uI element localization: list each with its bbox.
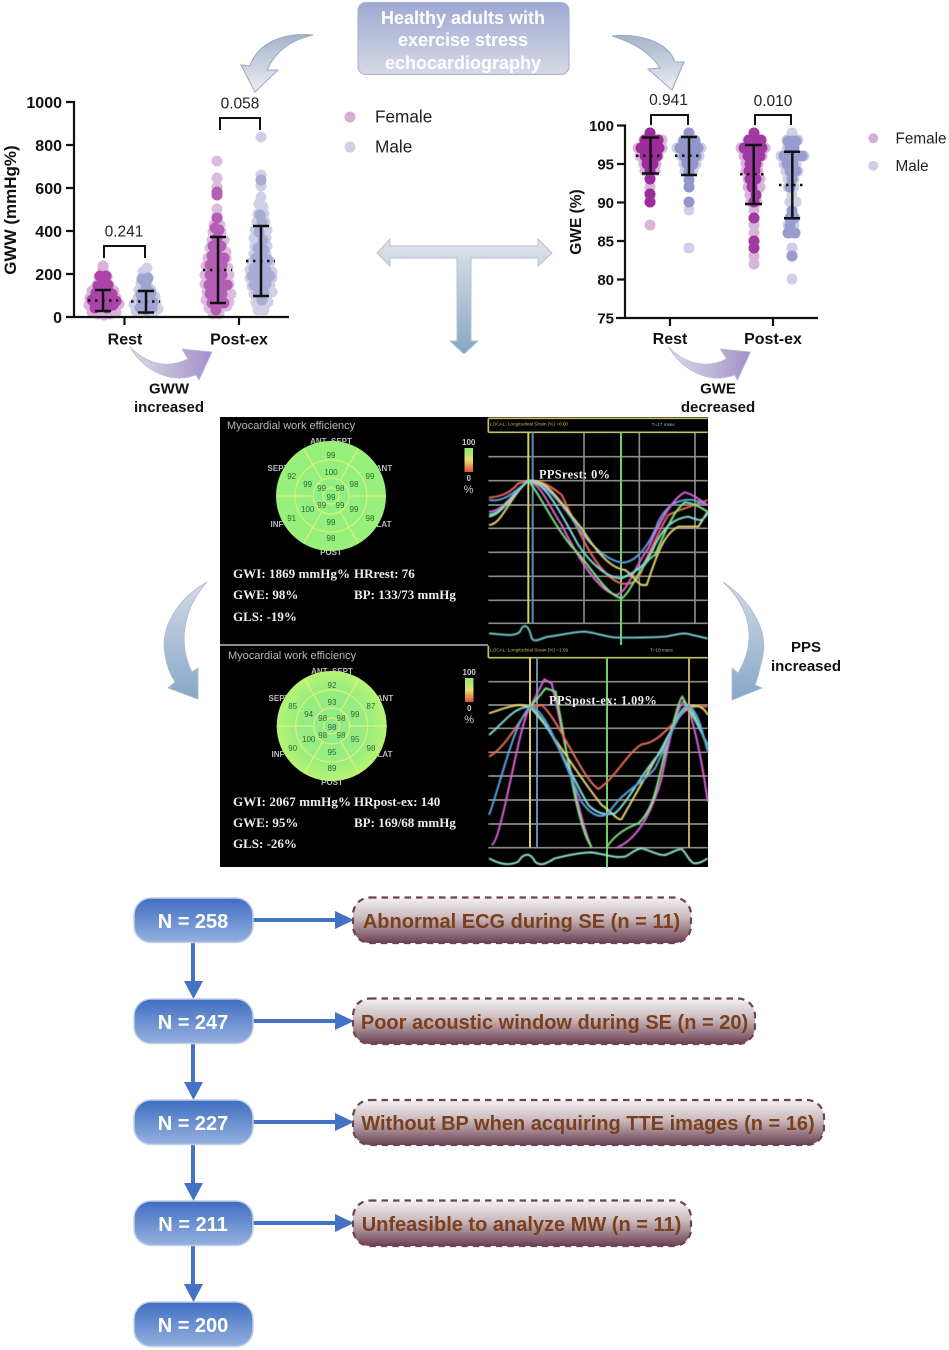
y tick labels: 85	[597, 234, 614, 250]
y tick labels: 100	[589, 118, 614, 135]
exclusion: unfeasible MW: Unfeasible to analyze MW (n = 11)	[362, 1214, 681, 1236]
panel: bullseye post-exercise: 85	[288, 702, 298, 711]
box: N = 258	[134, 898, 253, 942]
panel: strain curves at rest: T=17 msec	[652, 422, 675, 427]
panel: bullseye post-exercise: 99	[351, 710, 360, 719]
panel: bullseye at rest: INF	[271, 520, 284, 529]
exclusion: abnormal ECG: Abnormal ECG during SE (n = 11)	[363, 911, 680, 933]
error bars and means	[636, 137, 806, 218]
legend: GWW chart	[344, 106, 432, 156]
panel: bullseye post-exercise: SEPT	[269, 694, 290, 703]
panel: echo images	[220, 417, 708, 868]
axes	[66, 102, 289, 325]
label: GWW increased: GWW	[149, 380, 190, 398]
panel: strain curves at rest: LOCAL: Longitudinal Strain (%) =0.00	[490, 422, 568, 427]
dots: rest male	[677, 133, 701, 248]
dots: post-exercise male	[781, 133, 804, 279]
y tick labels	[26, 95, 62, 327]
colour bar post-exercise: 100	[463, 668, 476, 677]
dots: rest male	[134, 268, 158, 313]
stats post-exercise	[233, 794, 456, 851]
dots: rest female	[89, 266, 119, 315]
exclusion: without BP: Without BP when acquiring TTE images (n = 16)	[361, 1113, 815, 1135]
x labels: Post-ex	[744, 331, 802, 348]
panel: bullseye post-exercise: 93	[328, 698, 337, 707]
title box: healthy adults	[358, 2, 569, 74]
legend: GWE chart: Female	[896, 130, 947, 148]
p value brackets: 0.241	[105, 224, 143, 240]
label: PPS increased: PPS	[791, 639, 821, 656]
panel: bullseye post-exercise: LAT	[378, 750, 393, 759]
stats rest: HRrest: 76	[354, 566, 415, 581]
colour bar post-exercise: %	[464, 714, 474, 726]
dots: post-exercise male	[250, 137, 272, 310]
x labels	[653, 331, 802, 348]
arrow: T-shaped three-way	[377, 239, 552, 354]
box: N = 200	[134, 1302, 253, 1346]
panel: bullseye at rest: 99	[317, 501, 327, 510]
dots: rest female	[638, 133, 662, 225]
panel: bullseye post-exercise: 92	[328, 681, 337, 690]
stats rest: GWI: 1869 mmHg%	[233, 566, 350, 581]
label: GWE decreased: decreased	[681, 399, 755, 416]
x labels: Rest	[108, 332, 143, 348]
panel: bullseye at rest: Myocardial work efficiency	[227, 420, 356, 432]
y tick labels	[589, 118, 614, 328]
axes	[616, 126, 818, 326]
x labels: Rest	[653, 331, 688, 348]
stats rest: BP: 133/73 mmHg	[354, 587, 456, 602]
panel: bullseye at rest: 92	[287, 472, 297, 481]
panel: bullseye post-exercise: 98	[337, 714, 346, 723]
legend: GWE chart: Male	[896, 158, 929, 175]
title box: healthy adults: Healthy adults with	[381, 8, 545, 28]
box: N = 247	[134, 999, 253, 1044]
box: N = 227: N = 227	[158, 1113, 228, 1135]
panel: bullseye post-exercise: 94	[304, 710, 314, 719]
panel: bullseye at rest: 99	[327, 518, 336, 527]
panel: bullseye post-exercise: ANT_SEPT	[311, 667, 353, 676]
panel: bullseye at rest: 98	[366, 514, 375, 523]
panel: bullseye at rest: 99	[336, 501, 345, 510]
stats post-exercise: BP: 169/68 mmHg	[354, 815, 456, 830]
panel: bullseye post-exercise: 98	[337, 731, 346, 740]
panel: bullseye at rest: ANT	[376, 464, 392, 473]
panel: bullseye post-exercise: 95	[351, 735, 360, 744]
y tick labels: 400	[35, 224, 62, 241]
panel: bullseye post-exercise	[220, 644, 488, 851]
error bars and means	[88, 226, 275, 312]
panel: bullseye post-exercise: POST	[321, 778, 343, 787]
p value brackets: 0.010	[754, 93, 793, 110]
p value brackets: 0.058	[221, 96, 259, 112]
panel: bullseye post-exercise: 100	[302, 735, 316, 744]
flowchart	[134, 898, 824, 1346]
box: N = 258: N = 258	[158, 911, 228, 933]
panel: bullseye post-exercise: 90	[288, 744, 298, 753]
dots: post-exercise female	[205, 161, 231, 314]
colour bar rest: %	[464, 484, 474, 496]
panel: bullseye at rest: POST	[320, 548, 342, 557]
panel: strain curves post-exercise: PPSpost-ex: 1.09%	[549, 693, 657, 707]
panel: bullseye at rest: 100	[301, 505, 315, 514]
y tick labels: 200	[35, 267, 62, 284]
dots: post-exercise female	[741, 133, 765, 264]
arrow: PPS increased	[723, 582, 764, 700]
flow arrows down	[184, 942, 203, 1302]
p value brackets	[104, 96, 260, 258]
panel: bullseye at rest: 98	[327, 534, 336, 543]
panel: strain curves post-exercise: T=18 msec	[650, 648, 674, 653]
panel: bullseye at rest: 98	[336, 484, 345, 493]
y tick labels: 90	[597, 195, 614, 212]
polar map rest	[276, 441, 386, 551]
panel: bullseye post-exercise: 98	[328, 723, 337, 732]
panel: bullseye at rest: 91	[287, 514, 297, 523]
p value brackets	[649, 92, 793, 125]
y axis title: GWW (mmHg%)	[1, 145, 20, 275]
chart: GWW scatter	[1, 95, 289, 348]
panel: bullseye post-exercise: 98	[318, 714, 328, 723]
x labels	[108, 332, 268, 348]
colour bar post-exercise	[463, 668, 476, 726]
panel: bullseye post-exercise: 89	[328, 764, 337, 773]
panel: bullseye post-exercise: 98	[367, 744, 376, 753]
panel: strain curves at rest: PPSrest: 0%	[539, 467, 610, 481]
panel: strain curves at rest	[488, 418, 708, 645]
flow arrows right	[253, 911, 354, 1232]
title box: healthy adults: echocardiography	[385, 53, 541, 73]
panel: bullseye at rest: 99	[327, 451, 336, 460]
label: GWE decreased: GWE	[700, 380, 736, 398]
panel: bullseye at rest: 98	[350, 480, 359, 489]
label: GWW increased: increased	[134, 399, 204, 416]
exclusion: poor acoustic window: Poor acoustic window during SE (n = 20)	[361, 1012, 748, 1034]
exclusion: abnormal ECG	[353, 898, 691, 943]
panel: bullseye post-exercise: ANT	[377, 694, 393, 703]
arrow: GWW increased	[130, 347, 212, 380]
arrow: GWE decreased	[668, 347, 750, 380]
chart: GWE scatter	[568, 92, 818, 348]
panel: bullseye at rest: LAT	[377, 520, 392, 529]
legend: GWW chart: Female	[375, 106, 432, 126]
panel: bullseye at rest: ANT_SEPT	[310, 437, 352, 446]
exclusion: without BP	[353, 1100, 824, 1145]
box: N = 227	[134, 1100, 253, 1144]
panel: bullseye at rest: SEPT	[268, 464, 289, 473]
stats post-exercise: GWI: 2067 mmHg%	[233, 794, 351, 809]
panel: bullseye at rest: 99	[327, 493, 336, 502]
legend: GWE chart	[868, 130, 947, 175]
y tick labels: 75	[597, 310, 614, 328]
stats rest: GLS: -19%	[233, 609, 297, 624]
stats post-exercise: HRpost-ex: 140	[354, 794, 440, 809]
y tick labels: 1000	[26, 95, 62, 112]
stats post-exercise: GWE: 95%	[233, 815, 298, 830]
box: N = 247: N = 247	[158, 1012, 228, 1034]
panel: bullseye at rest: 100	[324, 468, 338, 477]
colour bar post-exercise: 0	[467, 704, 472, 713]
arrow: box to GWW chart	[241, 34, 313, 92]
y axis title: GWE (%)	[568, 189, 585, 255]
panel: bullseye post-exercise: 98	[318, 731, 328, 740]
panel: strain curves post-exercise: LOCAL: Longitudinal Strain (%) =1.09	[490, 648, 568, 653]
panel: bullseye at rest: 99	[350, 505, 359, 514]
colour bar rest	[462, 438, 476, 496]
colour bar rest: 0	[466, 474, 471, 483]
exclusion: unfeasible MW	[353, 1200, 691, 1246]
legend: GWW chart: Male	[375, 136, 412, 156]
panel: bullseye post-exercise: 87	[367, 702, 376, 711]
panel: bullseye post-exercise: INF	[272, 750, 285, 759]
arrow: rest to post-exercise left	[164, 582, 207, 699]
box: N = 200: N = 200	[158, 1315, 228, 1337]
arrow: box to GWE chart	[612, 35, 684, 90]
box: N = 211: N = 211	[158, 1214, 228, 1236]
y tick labels: 80	[597, 272, 614, 289]
label: PPS increased: increased	[771, 658, 841, 675]
panel: bullseye at rest	[227, 420, 476, 624]
exclusion: poor acoustic window	[353, 998, 755, 1044]
y tick labels: 600	[35, 181, 62, 198]
stats rest: GWE: 98%	[233, 587, 298, 602]
stats rest	[233, 566, 456, 624]
box: N = 211	[134, 1201, 253, 1246]
colour bar rest: 100	[462, 438, 476, 447]
panel: bullseye post-exercise: Myocardial work efficiency	[228, 650, 357, 662]
y tick labels: 800	[35, 138, 62, 155]
x labels: Post-ex	[210, 332, 268, 348]
stats post-exercise: GLS: -26%	[233, 836, 297, 851]
panel: bullseye at rest: 99	[317, 484, 327, 493]
y tick labels: 0	[53, 310, 62, 327]
p value brackets: 0.941	[649, 92, 688, 109]
panel: bullseye at rest: 99	[366, 472, 375, 481]
panel: strain curves post-exercise	[488, 646, 708, 868]
title box: healthy adults: exercise stress	[398, 30, 528, 50]
y tick labels: 95	[597, 156, 614, 174]
polar map post-exercise	[277, 671, 387, 781]
panel: bullseye post-exercise: 95	[328, 748, 337, 757]
panel: bullseye at rest: 99	[303, 480, 313, 489]
